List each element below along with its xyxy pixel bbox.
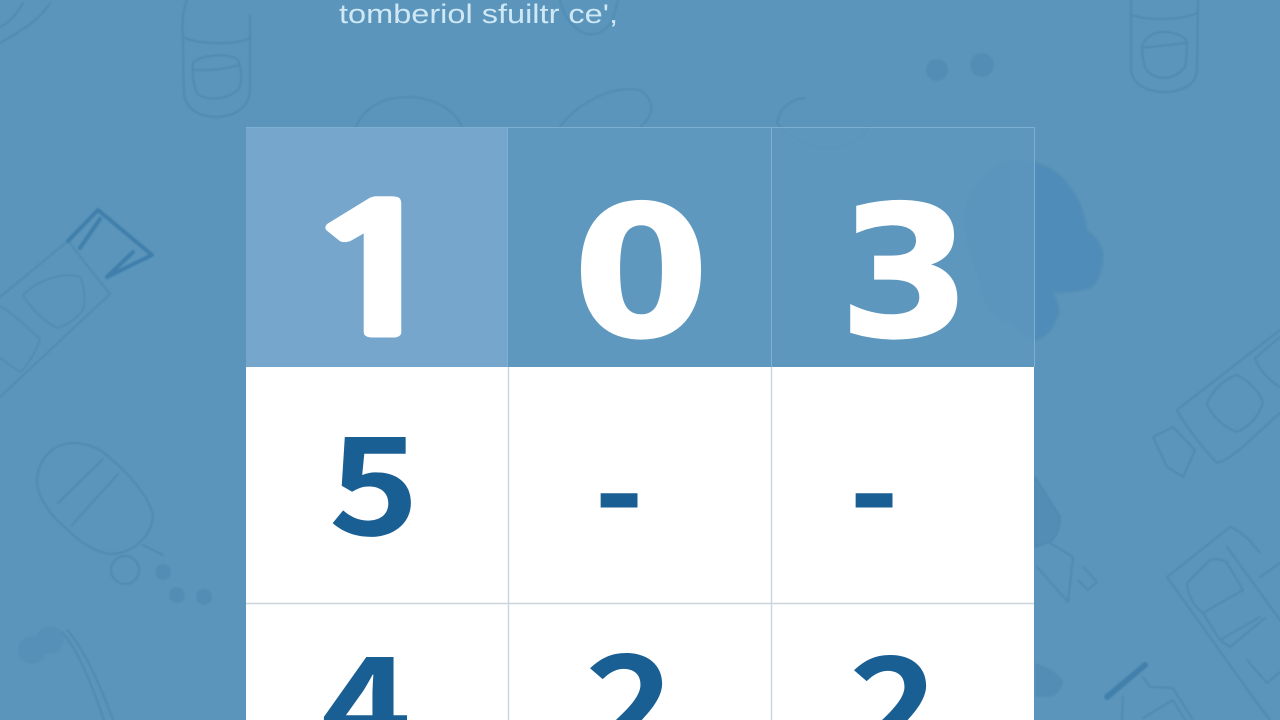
icon: dots top right xyxy=(926,53,994,81)
header cell 2 xyxy=(507,127,771,367)
icon: partial arcs top left corner xyxy=(0,3,50,43)
body background xyxy=(246,367,1034,720)
header number 3: 3 xyxy=(839,168,971,380)
icon: blob lower right edge xyxy=(1035,663,1063,697)
row 1 value 5: 5 xyxy=(329,378,419,574)
header number 0: 0 xyxy=(573,167,709,379)
icon: capsule top left xyxy=(182,0,250,117)
icon: cartridge left xyxy=(0,210,152,397)
icon: shapes above table xyxy=(356,0,870,148)
icon: brush bottom left xyxy=(18,626,113,720)
icon: clip below right edge xyxy=(1035,477,1097,602)
icon: tray right xyxy=(1167,527,1280,720)
icon: bottle bottom right xyxy=(1107,665,1193,720)
row 1 dash: - xyxy=(849,382,899,578)
icon: mouse shape left xyxy=(37,443,163,584)
grid lines xyxy=(246,367,1034,720)
icon: dots left xyxy=(155,564,212,605)
header cell 1 xyxy=(246,127,507,367)
header cell 3 xyxy=(771,127,1034,367)
icon: cartridge right xyxy=(1153,330,1280,477)
table xyxy=(246,127,1034,720)
header number 1: 1 xyxy=(296,184,457,361)
icon: capsule top right xyxy=(1131,0,1198,92)
header outline xyxy=(246,127,1034,367)
row 1 dash: - xyxy=(594,382,644,578)
icon: cloud shape right of table xyxy=(965,160,1103,340)
